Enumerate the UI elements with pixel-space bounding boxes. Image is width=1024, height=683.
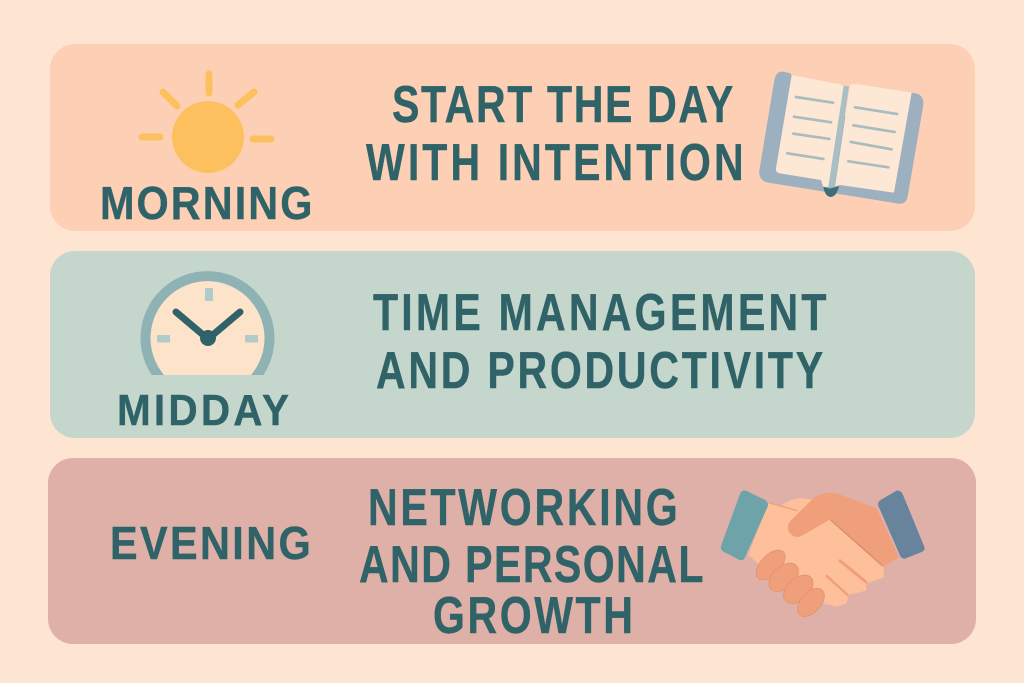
heading: networking and personal growth: GROWTH [433, 586, 633, 644]
heading: time management and productivity [373, 283, 827, 399]
heading: networking and personal growth: AND PERSONAL [359, 535, 703, 593]
heading: start the day with intention: START THE DAY [392, 75, 733, 133]
label: morning: MORNING [100, 178, 312, 230]
heading: networking and personal growth [359, 478, 703, 644]
icon: handshake [721, 491, 925, 621]
heading: time management and productivity: AND PRODUCTIVITY [376, 341, 823, 399]
label: midday: MIDDAY [117, 385, 289, 434]
heading: time management and productivity: TIME MANAGEMENT [373, 283, 827, 341]
panel: midday [50, 251, 975, 438]
heading: start the day with intention: WITH INTENTION [366, 133, 744, 191]
icon: sun [142, 74, 271, 173]
icon: clock [140, 271, 275, 375]
heading: networking and personal growth: NETWORKING [368, 478, 678, 536]
icon: open book [759, 72, 923, 204]
panel: morning [50, 44, 975, 231]
panel: evening [48, 458, 976, 644]
label: evening: EVENING [110, 518, 311, 570]
heading: start the day with intention [366, 75, 744, 191]
